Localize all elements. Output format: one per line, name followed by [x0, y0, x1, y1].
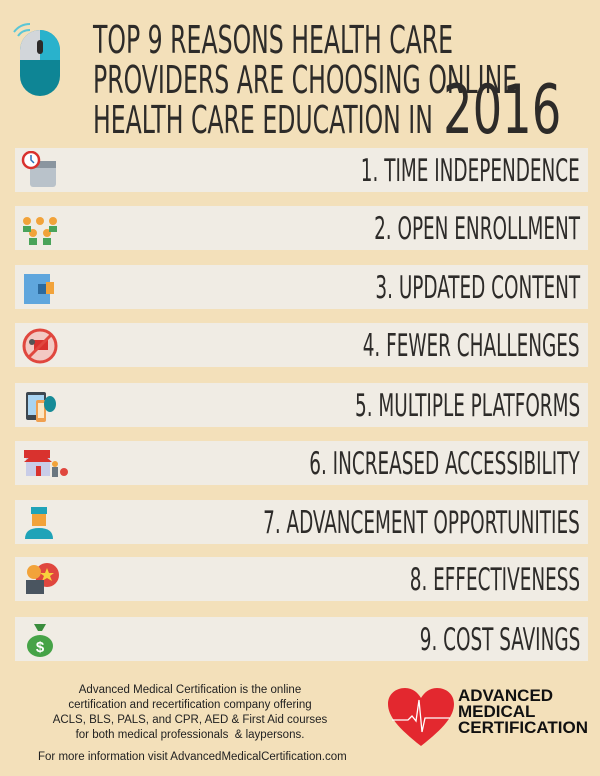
panel: 2 open enrollment: [15, 206, 588, 250]
title: TOP 9 REASONS HEALTH CARE: [93, 18, 453, 62]
panel: 7 advancement opportunities: 7. ADVANCEMENT OPPORTUNITIES: [263, 505, 580, 541]
panel: 1 time independence: [15, 148, 588, 192]
icon: mouse: [13, 23, 60, 96]
panel: 8 effectiveness: 8. EFFECTIVENESS: [410, 562, 580, 598]
panel: 6 increased accessibility: [15, 441, 588, 485]
footer text: [52, 684, 327, 741]
panel: 1 time independence: 1. TIME INDEPENDENCE: [361, 153, 580, 189]
title: [92, 18, 561, 150]
logo: CERTIFICATION: [458, 718, 588, 737]
panel: 6 increased accessibility: 6. INCREASED ACCESSIBILITY: [310, 446, 580, 482]
panel: 5 multiple platforms: 5. MULTIPLE PLATFORMS: [355, 388, 580, 424]
panel: 8 effectiveness: [15, 557, 588, 601]
panel: 2 open enrollment: 2. OPEN ENROLLMENT: [374, 211, 580, 247]
footer link text: For more information visit AdvancedMedicalCertification.com: [38, 751, 347, 763]
title: HEALTH CARE EDUCATION IN: [93, 98, 433, 142]
title: 2016: [443, 71, 561, 150]
logo: ADVANCED: [458, 686, 553, 705]
title: PROVIDERS ARE CHOOSING ONLINE: [93, 58, 517, 102]
footer text: for both medical professionals & laypersons.: [76, 729, 304, 741]
footer text: Advanced Medical Certification is the online: [79, 684, 301, 696]
panel: 9 cost savings: $: [36, 639, 45, 656]
footer text: certification and recertification company offering: [68, 699, 312, 711]
panel: 3 updated content: [15, 265, 588, 309]
logo: MEDICAL: [458, 702, 535, 721]
panel: 5 multiple platforms: [15, 383, 588, 427]
footer text: ACLS, BLS, PALS, and CPR, AED & First Aid courses: [53, 714, 327, 726]
logo: [388, 686, 588, 746]
panel: 4 fewer challenges: 4. FEWER CHALLENGES: [363, 328, 580, 364]
panel: 7 advancement opportunities: [15, 500, 588, 544]
panel: 9 cost savings: 9. COST SAVINGS: [419, 622, 580, 658]
panel: 3 updated content: 3. UPDATED CONTENT: [375, 270, 580, 306]
panel: 4 fewer challenges: [15, 323, 588, 367]
panel: 9 cost savings: [15, 617, 588, 661]
